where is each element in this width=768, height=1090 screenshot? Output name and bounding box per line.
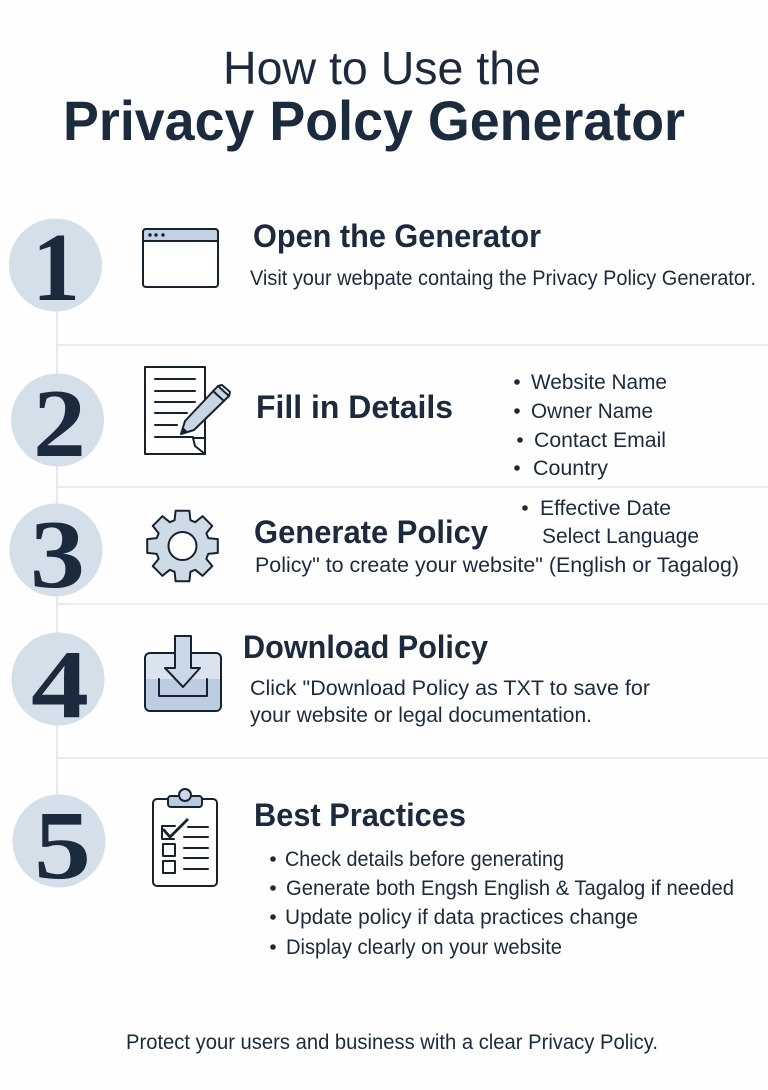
step 1 heading: Open the Generator <box>253 218 541 254</box>
step 3 number: 3 <box>30 501 85 609</box>
icon: clipboard checklist <box>153 789 217 886</box>
step 5 list <box>270 848 734 959</box>
step 2 list <box>514 371 667 480</box>
icon: gear <box>147 511 218 581</box>
step 2 number: 2 <box>33 370 86 478</box>
step 2 heading: Fill in Details <box>256 389 453 425</box>
step 5 list: Update policy if data practices change <box>285 906 638 929</box>
step 5 list: Check details before generating <box>285 848 564 871</box>
title: Privacy Polcy Generator <box>63 89 685 152</box>
step 1 description: Visit your webpate containg the Privacy Policy Generator. <box>250 267 756 290</box>
step 4 number: 4 <box>31 631 89 739</box>
icon: document with pencil <box>145 367 230 454</box>
step 4 heading: Download Policy <box>243 629 488 665</box>
step 3 list: Select Language <box>542 525 699 548</box>
step 2 list: Country <box>533 457 609 480</box>
title: How to Use the <box>223 42 541 94</box>
title <box>63 42 685 152</box>
footer: Protect your users and business with a clear Privacy Policy. <box>126 1031 658 1054</box>
step 2 list: Contact Email <box>534 429 666 452</box>
step 5 number: 5 <box>34 792 91 900</box>
step 4 description: your website or legal documentation. <box>250 704 592 727</box>
step 5 list: Generate both Engsh English & Tagalog if needed <box>286 877 734 900</box>
step 2 list: Website Name <box>531 371 667 394</box>
step 1 number <box>9 214 102 322</box>
step 5 list: Display clearly on your website <box>286 936 562 959</box>
step 5 heading: Best Practices <box>254 797 466 833</box>
step 3 heading: Generate Policy <box>254 514 488 550</box>
step 4 description <box>250 677 650 727</box>
step 3 list: Effective Date <box>540 497 671 520</box>
icon: browser window <box>143 229 218 287</box>
step 3 list <box>522 497 699 548</box>
step 2 list: Owner Name <box>531 400 653 423</box>
step 3 description: Policy" to create your website" (English or Tagalog) <box>255 554 739 577</box>
icon: download tray <box>145 636 221 711</box>
step 1 number: 1 <box>32 214 80 322</box>
step 3 number <box>10 501 102 609</box>
step 4 number <box>12 631 104 739</box>
step 2 number <box>11 370 104 478</box>
step 5 number <box>12 792 106 900</box>
step 4 description: Click "Download Policy as TXT to save for <box>250 677 650 700</box>
